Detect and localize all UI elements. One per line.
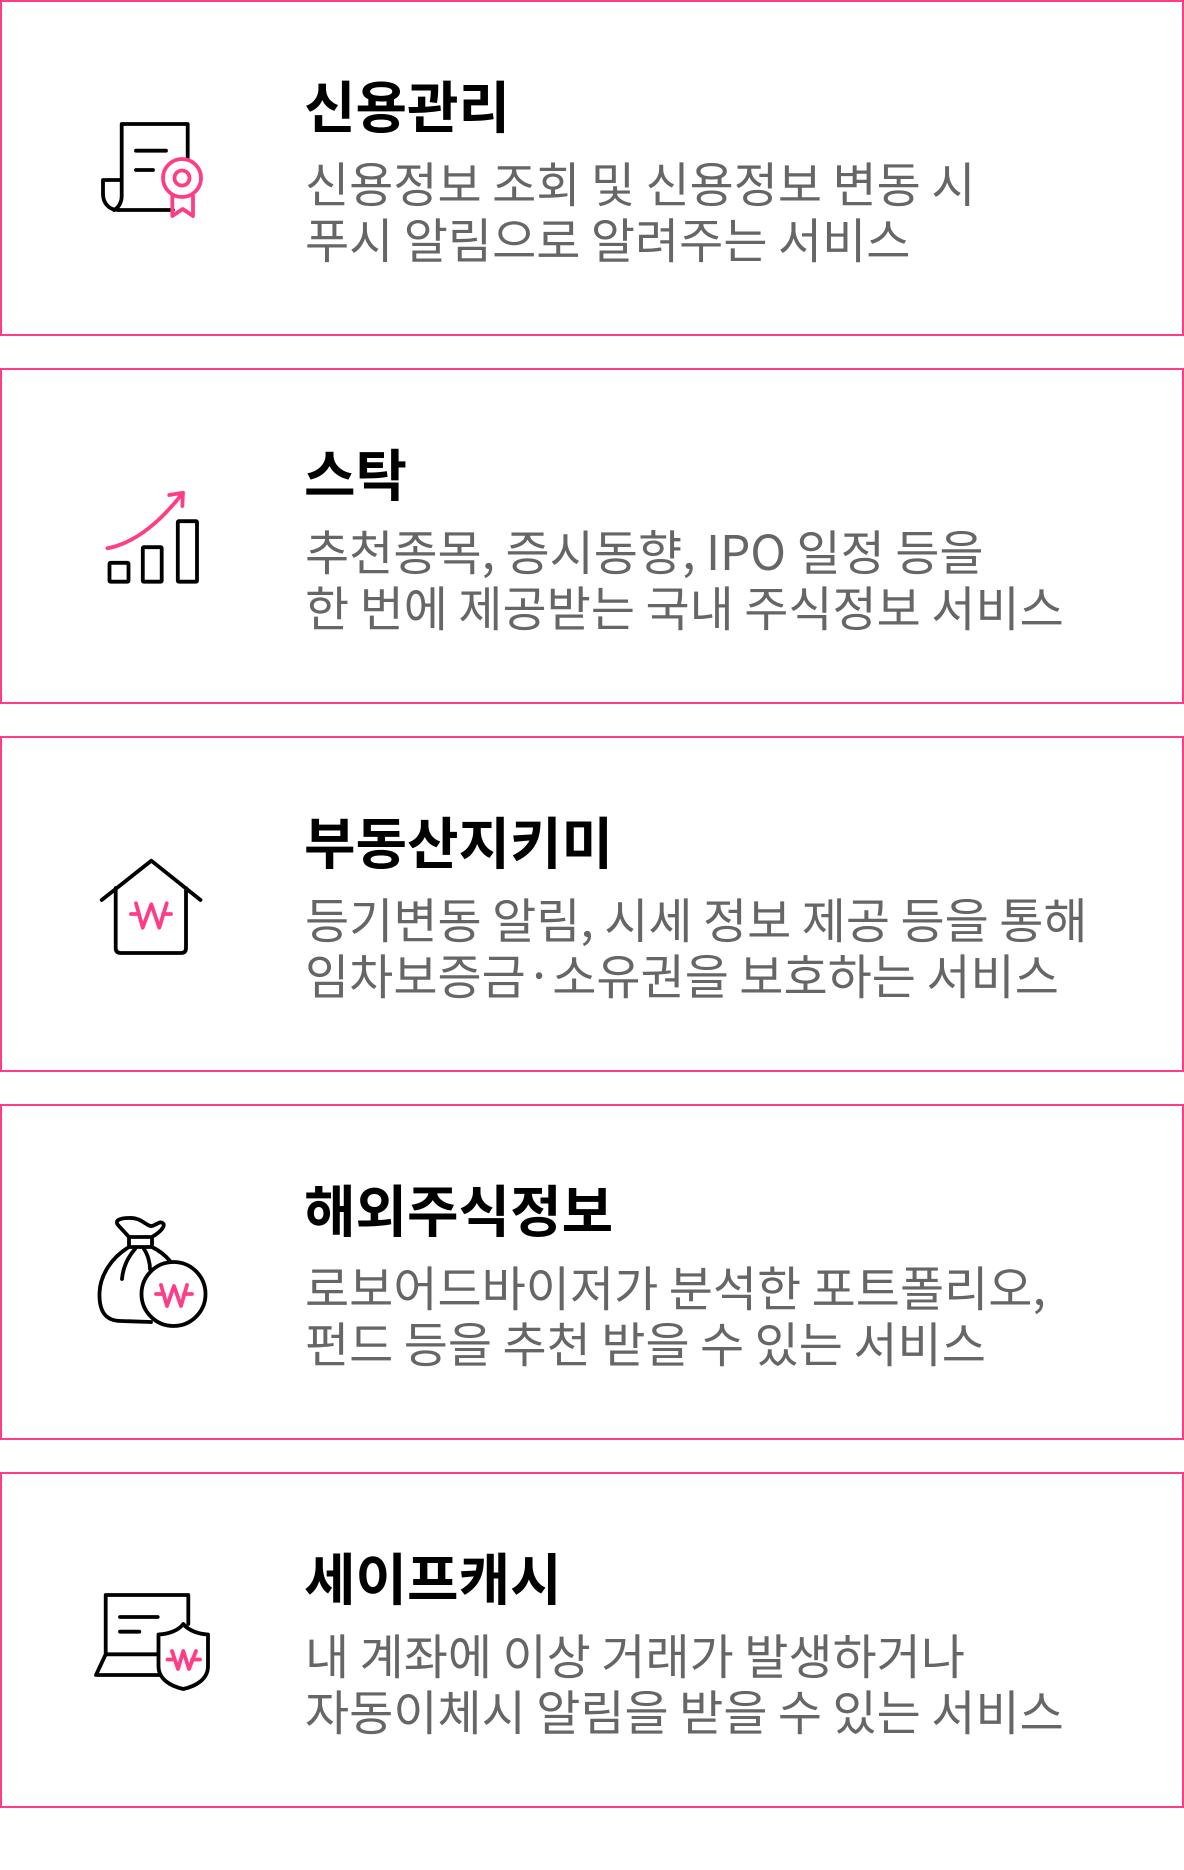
panel: overseas stock information (0, 1104, 1184, 1440)
icon: house with won sign (102, 861, 200, 953)
panel: safe cash (0, 1472, 1184, 1808)
panel: stock (0, 368, 1184, 704)
text: safe cash description (305, 1618, 1064, 1744)
text: stock description: 한 번에 제공받는 국내 주식정보 서비스 (305, 570, 1064, 640)
text: real estate guard description: 임차보증금·소유권을 보호하는 서비스 (305, 938, 1059, 1008)
text: real estate guard description (305, 882, 1088, 1008)
text: real estate guard description: 등기변동 알림, 시세 정보 제공 등을 통해 (305, 882, 1088, 952)
icon: money bag with won coin (99, 1218, 206, 1326)
text: credit management description: 푸시 알림으로 알려주는 서비스 (305, 202, 910, 272)
panel: real estate guard (0, 736, 1184, 1072)
heading: safe cash: 세이프캐시 (304, 1536, 562, 1617)
text: safe cash description: 자동이체시 알림을 받을 수 있는 서비스 (305, 1674, 1064, 1744)
text: overseas stock description: 펀드 등을 추천 받을 수 있는 서비스 (305, 1306, 986, 1376)
heading: stock: 스탁 (304, 432, 407, 513)
heading: overseas stock information: 해외주식정보 (304, 1168, 613, 1249)
heading: credit management: 신용관리 (304, 64, 510, 145)
icon: laptop with shield (96, 1595, 208, 1689)
icon: rising bar chart (108, 493, 197, 582)
text: credit management description: 신용정보 조회 및 신용정보 변동 시 (305, 146, 975, 216)
heading: real estate guard: 부동산지키미 (304, 800, 613, 881)
icon: certificate with ribbon (103, 124, 201, 216)
text: safe cash description: 내 계좌에 이상 거래가 발생하거나 (305, 1618, 965, 1688)
text: stock description (305, 514, 1064, 640)
panel: credit management (0, 0, 1184, 336)
text: overseas stock description (305, 1250, 1046, 1376)
text: credit management description (305, 146, 975, 272)
text: stock description: 추천종목, 증시동향, IPO 일정 등을 (305, 514, 984, 584)
text: overseas stock description: 로보어드바이저가 분석한 포트폴리오, (305, 1250, 1046, 1320)
